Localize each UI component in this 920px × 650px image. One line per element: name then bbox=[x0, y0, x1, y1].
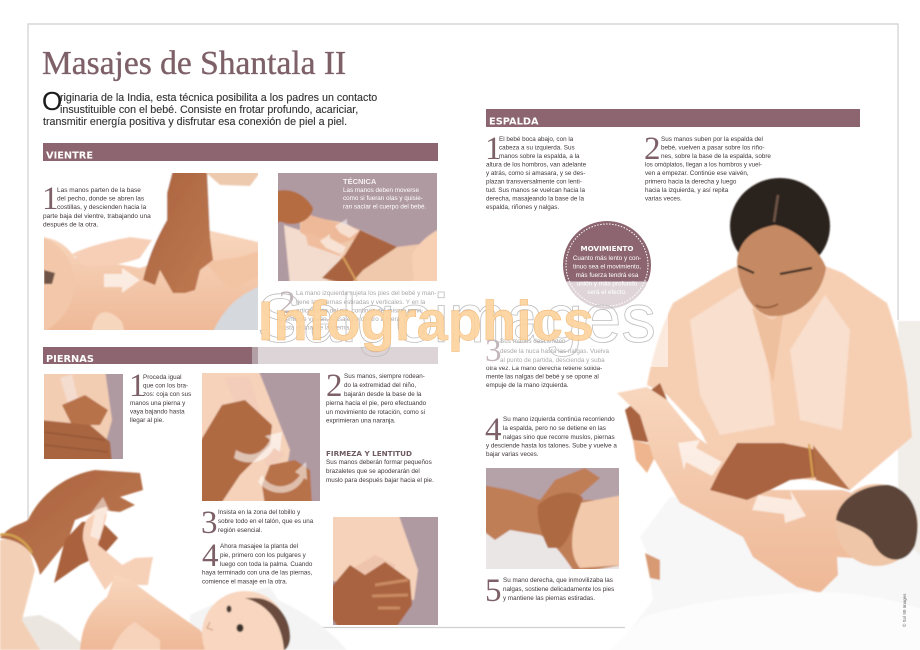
espalda step 1 text: tud. Sus manos se vuelcan hacia la bbox=[486, 187, 586, 194]
vientre step 1 text: del pecho, donde se abren las bbox=[57, 196, 145, 202]
panel: tecnica bbox=[278, 173, 437, 281]
espalda step 2 text: primero hacia la derecha y luego bbox=[645, 178, 737, 186]
espalda step 3 text: Sus manos descienden bbox=[500, 338, 566, 345]
espalda step 5 text: 5 bbox=[485, 573, 502, 609]
piernas step 1 text: manos una pierna y bbox=[130, 400, 186, 407]
espalda step 2 text bbox=[644, 131, 771, 202]
callout: movimiento: Cuanto más lento y con- bbox=[573, 255, 641, 262]
vientre step 1 text: Las manos parten de la base bbox=[57, 187, 141, 194]
photo: piernas 3 bbox=[333, 517, 438, 625]
espalda step 3 text bbox=[485, 333, 609, 389]
intro text: insustituible con el bebé. Consiste en frotar profundo, acariciar, bbox=[60, 104, 358, 116]
piernas step 4 text: haya terminado con una de las piernas, bbox=[202, 570, 313, 576]
section heading: vientre: VIENTRE bbox=[46, 150, 93, 162]
espalda step 1 text: El bebé boca abajo, con la bbox=[499, 136, 574, 143]
espalda step 5 text: Su mano derecha, que inmovilizaba las bbox=[503, 577, 613, 584]
piernas step 2 text: exprimieran una naranja. bbox=[326, 418, 396, 424]
intro text: riginaria de la India, esta técnica posibilita a los padres un contacto bbox=[60, 92, 377, 104]
vientre step 1 text bbox=[42, 181, 151, 228]
espalda step 3 text: 3 bbox=[485, 333, 502, 369]
espalda step 4 text: 4 bbox=[485, 412, 502, 448]
piernas step 3 text: Insista en la zona del tobillo y bbox=[218, 509, 301, 516]
espalda step 3 text: empuje de la mano izquierda. bbox=[486, 382, 569, 389]
espalda step 2 text: varias veces. bbox=[645, 196, 682, 202]
piernas step 3 text: 3 bbox=[201, 505, 218, 541]
firmeza y lentitud note: Sus manos deberán formar pequeños bbox=[326, 459, 432, 466]
vientre step 1 text: después de la otra. bbox=[43, 222, 98, 228]
espalda step 3 text: desde la nuca hasta las nalgas. Vuelva bbox=[500, 348, 609, 355]
firmeza y lentitud note: FIRMEZA Y LENTITUD bbox=[326, 449, 412, 458]
espalda step 2 text: bebé, vuelven a pasar sobre los riño- bbox=[661, 144, 765, 152]
photo: piernas 2 bbox=[202, 373, 320, 501]
photo: hand on baby belly bbox=[40, 170, 262, 334]
piernas step 4 text: luego con toda la palma. Cuando bbox=[220, 561, 313, 568]
piernas step 2 text: 2 bbox=[326, 368, 342, 404]
callout: movimiento: tinuo sea el movimiento, bbox=[573, 264, 641, 270]
espalda step 3 text: al punto de partida, descienda y suba bbox=[500, 357, 605, 364]
espalda step 1 text: espalda, riñones y nalgas. bbox=[486, 204, 559, 211]
photo: woman massaging baby bbox=[610, 178, 920, 650]
espalda step 4 text bbox=[485, 412, 617, 458]
piernas step 1 text: llegar al pie. bbox=[130, 417, 164, 424]
vientre step 1 text: 1 bbox=[42, 181, 58, 217]
vientre step 1 text: costillas, y descienden hacia la bbox=[57, 204, 147, 211]
piernas step 2 text: Sus manos, siempre rodean- bbox=[344, 373, 425, 380]
photo: piernas 1 bbox=[44, 374, 123, 459]
espalda step 1 text bbox=[485, 131, 587, 211]
piernas step 2 text: do la extremidad del niño, bbox=[344, 382, 416, 389]
watermark: Infographics bbox=[258, 289, 594, 352]
callout: movimiento: más fuerza tendrá esa bbox=[576, 272, 639, 279]
piernas step 2 text: bajarán desde la base de la bbox=[344, 391, 422, 398]
espalda step 2 text: los omóplatos, llegan a los hombros y vuel- bbox=[645, 162, 762, 168]
espalda step 2 text: 2 bbox=[644, 131, 660, 167]
tecnica text: Las manos deben moverse bbox=[343, 187, 419, 194]
espalda step 1 text: y atrás, como si amasara, y se des- bbox=[486, 170, 585, 177]
piernas step 4 text: pie, primero con los pulgares y bbox=[220, 552, 307, 559]
intro text: O bbox=[42, 86, 62, 116]
section heading: espalda: ESPALDA bbox=[489, 116, 539, 128]
vientre step 2 text bbox=[279, 285, 436, 332]
piernas step 1 text: Proceda igual bbox=[143, 374, 182, 381]
section heading: espalda bbox=[486, 109, 860, 128]
espalda step 1 text: cabeza a su izquierda. Sus bbox=[499, 144, 575, 152]
vientre step 2 text: tiene las piernas estiradas y verticales. Y en la bbox=[296, 299, 426, 306]
callout: movimiento: unión y más profundo bbox=[577, 280, 638, 288]
piernas step 2 text: pierna hacia el pie, pero efectuando bbox=[326, 400, 427, 407]
piernas step 1 text: zos: coja con sus bbox=[143, 391, 191, 398]
section heading: piernas: PIERNAS bbox=[46, 354, 94, 365]
vientre step 1 text: parte baja del vientre, trabajando una bbox=[43, 213, 151, 220]
section heading: vientre bbox=[43, 143, 438, 162]
piernas step 1 text bbox=[129, 368, 191, 424]
photo: espalda feet and buttocks bbox=[486, 468, 619, 569]
espalda step 5 text bbox=[485, 573, 614, 609]
tecnica text: TÉCNICA bbox=[343, 177, 377, 186]
espalda step 1 text: plazan transversalmente con lenti- bbox=[486, 178, 582, 186]
piernas step 4 text: 4 bbox=[202, 538, 218, 574]
photo credit: © Sol 90 Images bbox=[901, 593, 907, 627]
firmeza y lentitud note bbox=[326, 449, 434, 484]
vientre step 2 text: articulación del pie, continúa del mismo movi- bbox=[296, 308, 423, 314]
title: Masajes de Shantala II bbox=[42, 45, 346, 82]
espalda step 5 text: y mantiene las piernas estiradas. bbox=[503, 595, 595, 602]
piernas step 4 text bbox=[202, 538, 313, 586]
espalda step 4 text: la espalda, pero no se detiene en las bbox=[503, 425, 606, 432]
tecnica text: como si fueran olas y quisie- bbox=[343, 195, 423, 202]
tecnica text: ran sacíar el cuerpo del bebé. bbox=[343, 204, 427, 210]
espalda step 3 text: mente las nalgas del bebé y se opone al bbox=[486, 374, 599, 380]
callout: movimiento bbox=[560, 220, 654, 311]
vientre step 2 text: 2 bbox=[279, 285, 296, 321]
tecnica text bbox=[343, 177, 427, 210]
piernas step 1 text: 1 bbox=[129, 368, 146, 404]
piernas step 2 text bbox=[326, 368, 427, 424]
espalda step 3 text: otra vez. La mano derecha retiene solida- bbox=[486, 365, 602, 372]
espalda step 2 text: Sus manos suben por la espalda del bbox=[661, 136, 763, 143]
espalda step 2 text: nes, sobre la base de la espalda, sobre bbox=[661, 153, 771, 160]
piernas step 4 text: Ahora masajee la planta del bbox=[220, 543, 298, 550]
intro text: transmitir energía positiva y disfrutar esa conexión de piel a piel. bbox=[43, 116, 347, 128]
vientre step 2 text: hasta el final de la pierna. bbox=[279, 324, 351, 332]
espalda step 1 text: derecha, masajeando la base de la bbox=[486, 196, 585, 202]
espalda step 4 text: nalgas sino que recorre muslos, piernas bbox=[503, 434, 615, 441]
vientre step 2 text: miento de vaivén, masaje de dentro a fuera bbox=[279, 316, 401, 323]
firmeza y lentitud note: brazaletes que se apoderarán del bbox=[326, 468, 420, 475]
espalda step 4 text: bajar varias veces. bbox=[486, 451, 539, 458]
piernas step 4 text: comience el masaje en la otra. bbox=[202, 578, 288, 586]
piernas step 1 text: que con los bra- bbox=[143, 382, 188, 390]
espalda step 5 text: nalgas, sostiene delicadamente los pies bbox=[503, 586, 614, 593]
espalda step 2 text: ven a empezar. Continúe ese vaivén, bbox=[645, 170, 749, 177]
callout: movimiento: será el efecto. bbox=[587, 289, 627, 296]
espalda step 1 text: 1 bbox=[485, 131, 502, 167]
vientre step 2 text: La mano izquierda sujeta los pies del bebé y man- bbox=[296, 290, 436, 297]
piernas step 3 text: sobre todo en el talón, que es una bbox=[218, 518, 314, 525]
espalda step 1 text: altura de los hombros, van adelante bbox=[486, 162, 587, 168]
espalda step 4 text: y desciende hasta los talones. Sube y vuelve a bbox=[486, 442, 617, 450]
section heading: piernas bbox=[43, 347, 438, 365]
watermark: Salgoimages bbox=[257, 280, 656, 357]
firmeza y lentitud note: muslo para después bajar hacia el pie. bbox=[326, 477, 434, 484]
espalda step 1 text: manos sobre la espalda, a la bbox=[499, 153, 580, 160]
piernas step 2 text: un movimiento de rotación, como si bbox=[326, 409, 425, 416]
espalda step 2 text: hacia la izquierda, y así repita bbox=[645, 187, 729, 194]
piernas step 3 text: región esencial. bbox=[218, 527, 262, 534]
photo: baby with leg raised and hands bbox=[0, 470, 347, 650]
piernas step 3 text bbox=[201, 505, 314, 541]
espalda step 4 text: Su mano izquierda continúa recorriendo bbox=[503, 416, 615, 423]
piernas step 1 text: vaya bajando hasta bbox=[130, 408, 185, 416]
callout: movimiento: MOVIMIENTO bbox=[580, 244, 634, 253]
intro text bbox=[42, 86, 377, 128]
